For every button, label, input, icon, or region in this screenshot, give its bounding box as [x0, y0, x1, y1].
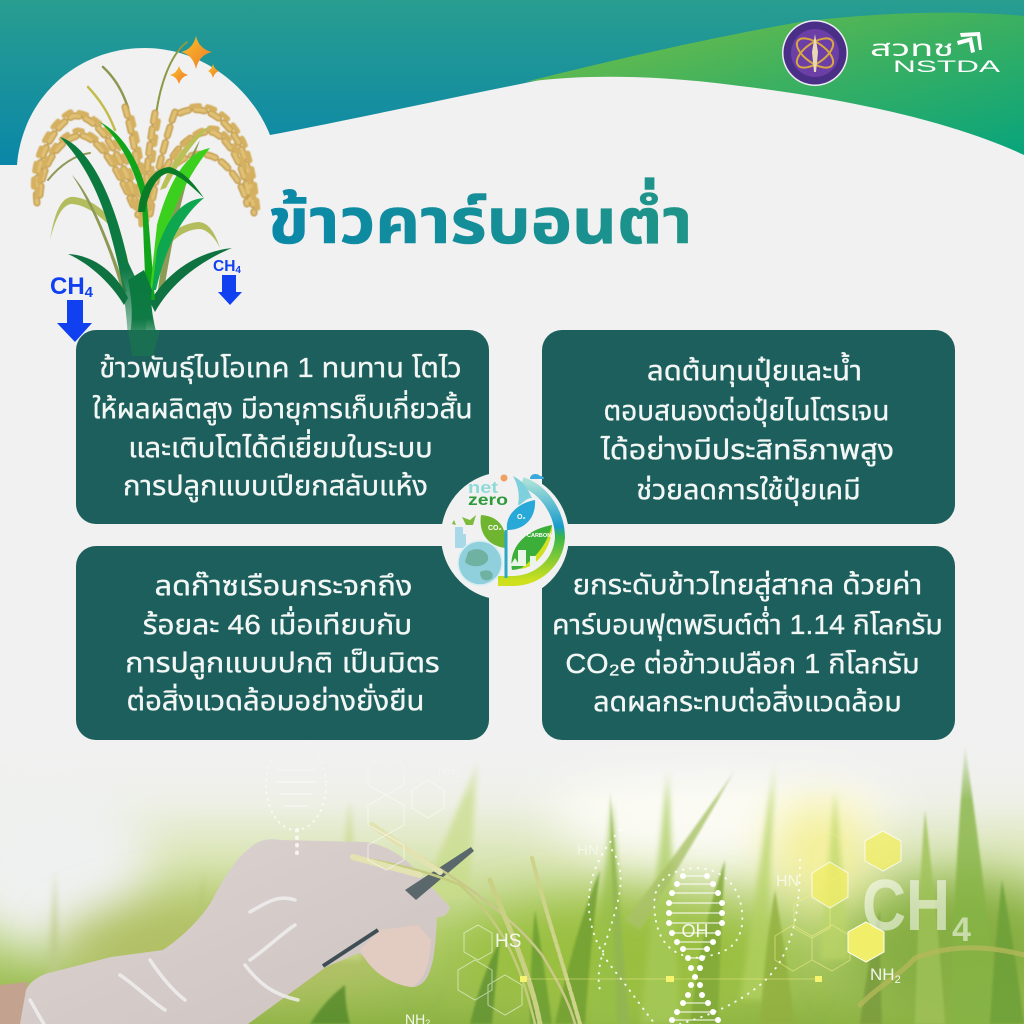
circular arrow ring [498, 482, 560, 581]
photo chemistry labels: CH [862, 866, 950, 946]
golden panicles [33, 106, 258, 225]
panel: rice variety: การปลูกแบบเปียกสลับแห้ง [123, 470, 428, 501]
small building [455, 527, 466, 548]
globe [458, 541, 502, 585]
photo chemistry labels: 2 [455, 770, 460, 779]
logo: NSTDA: NSTDA [893, 58, 1000, 76]
rice ears held in tweezers [353, 825, 1024, 1024]
stem [504, 530, 508, 578]
panel: rice variety: ให้ผลผลิตสูง มีอายุการเก็บเกี่ยวสั้น [92, 393, 473, 424]
leaf labels: CO₂ [488, 525, 502, 532]
panel: rice variety: และเติบโตได้ดีเยี่ยมในระบบ [128, 432, 433, 463]
sharp foreground blades [310, 745, 1024, 1024]
top haze [276, 740, 972, 796]
photo chemistry labels [406, 845, 971, 1024]
gloved hand [20, 839, 450, 1024]
field base [0, 792, 1024, 1024]
leaf labels [468, 478, 551, 539]
panel: rice variety: ข้าวพันธุ์ไบโอเทค 1 ทนทาน โตไว [99, 352, 462, 383]
panel: rice variety [76, 330, 489, 524]
CH4 down arrow, small [213, 258, 242, 305]
DNA helix, upper [265, 773, 327, 855]
panel: carbon footprint: CO₂e ต่อข้าวเปลือก 1 กิโลกรัม [565, 648, 920, 679]
rice stem showing through card [128, 330, 160, 356]
photo chemistry labels: HN [577, 842, 599, 859]
yellow hexagons [812, 831, 901, 962]
CH4 down arrow, small: CH [213, 258, 235, 275]
soft distant blades [45, 760, 850, 1024]
sparkle stars [170, 36, 219, 84]
DNA helix, lower [520, 830, 822, 1024]
photo chemistry labels: NH [870, 965, 895, 984]
leaf labels: O₂ [517, 514, 526, 521]
panel: lower cost [542, 330, 955, 524]
bright green leaves [100, 122, 155, 300]
panel: lower cost: ลดต้นทุนปุ๋ยและน้ำ [647, 355, 862, 386]
panel: greenhouse gas: ลดก๊าซเรือนกระจกถึง [155, 570, 412, 601]
rice plant illustration [33, 42, 258, 345]
leaf: CO2 [481, 515, 506, 548]
panel: carbon footprint [542, 546, 955, 740]
olive and khaki leaves [50, 197, 120, 240]
photo chemistry labels: 2 [895, 974, 901, 986]
panel: greenhouse gas: ต่อสิ่งแวดล้อมอย่างยั่งยืน [127, 685, 424, 716]
title: ข้าวคาร์บอนต่ำ [268, 187, 693, 257]
bare wrist [0, 982, 28, 1024]
logo: research institute seal [782, 20, 848, 86]
panel: greenhouse gas [76, 546, 489, 740]
CH4 down arrow, large [50, 273, 94, 342]
logo: NSTDA [870, 32, 1000, 76]
panel: lower cost: ช่วยลดการใช้ปุ๋ยเคมี [636, 474, 861, 505]
panel: carbon footprint: ลดผลกระทบต่อสิ่งแวดล้อม [593, 686, 902, 717]
panel: greenhouse gas: ร้อยละ 46 เมื่อเทียบกับ [143, 609, 412, 640]
header: green wave [525, 13, 1024, 155]
stem base [128, 270, 160, 345]
photo chemistry labels: HN [318, 739, 338, 755]
logo: NSTDA: สวทช [870, 36, 954, 61]
CH4 down arrow, large: CH [50, 273, 85, 300]
bottom photo: scientist holding rice in a field [0, 739, 1024, 1024]
leaf labels: zero [468, 492, 508, 509]
swirl figure [513, 476, 532, 505]
photo chemistry labels: OH [682, 921, 708, 941]
sun and cloud [500, 474, 508, 482]
icon: net zero circle [441, 472, 569, 600]
leaf: O2 [507, 500, 535, 530]
tweezers, upper body [405, 847, 474, 900]
photo chemistry labels: HS [495, 931, 521, 952]
leaf labels: net [468, 478, 498, 497]
panel: carbon footprint: คาร์บอนฟุตพรินต์ต่ำ 1.14 กิโลกรัม [552, 609, 943, 640]
rice stems [48, 42, 187, 180]
butterflies [452, 515, 476, 525]
photo chemistry labels: NH [438, 764, 455, 778]
photo chemistry labels: HN [776, 873, 799, 890]
CH4 down arrow, small: 4 [235, 265, 241, 276]
dark green leaves [60, 137, 146, 340]
leaf labels: CARBON [527, 533, 551, 539]
small city [510, 550, 536, 566]
panel: greenhouse gas: การปลูกแบบปกติ เป็นมิตร [125, 647, 440, 678]
CH4 down arrow, large: 4 [85, 284, 94, 301]
leaf: carbon [511, 525, 552, 570]
hexagon molecule lattice [368, 755, 850, 1015]
photo chemistry labels: 4 [952, 911, 971, 949]
panel: carbon footprint: ยกระดับข้าวไทยสู่สากล ด้วยค่า [573, 569, 922, 600]
header: teal wave with arch [0, 0, 1024, 165]
panel: lower cost: ได้อย่างมีประสิทธิภาพสูง [601, 434, 894, 465]
panel: lower cost: ตอบสนองต่อปุ๋ยไนโตรเจน [604, 395, 889, 426]
